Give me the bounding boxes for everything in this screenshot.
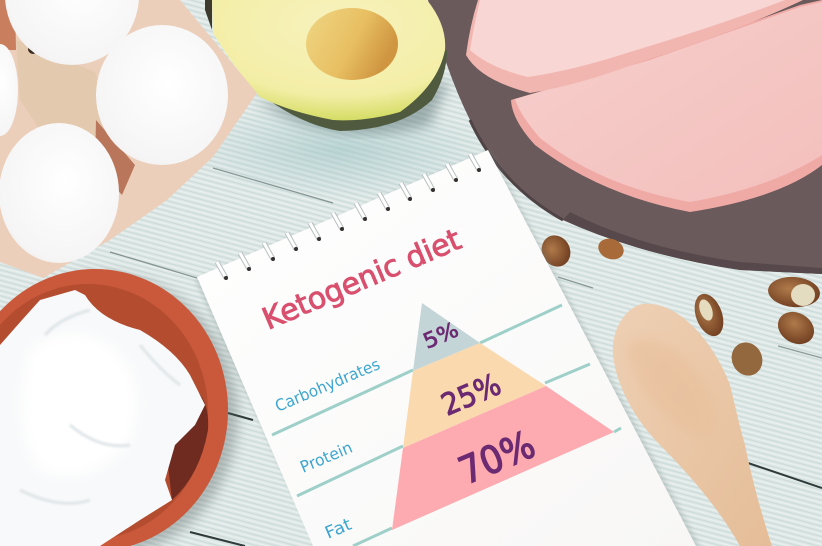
label: Fat: Fat <box>322 515 355 544</box>
raw meat: upper slice <box>466 0 803 93</box>
value: 5%: 5% <box>420 317 462 354</box>
spiral binding <box>217 154 481 280</box>
eggs <box>0 0 228 263</box>
avocado pit <box>306 8 398 80</box>
notepad sheet <box>195 150 700 546</box>
coconut oil <box>0 290 205 546</box>
raw meat: lower slice <box>511 0 822 212</box>
wooden spoon <box>613 304 772 546</box>
tier: fat 70% <box>392 386 614 530</box>
pyramid chart <box>392 303 614 530</box>
slate board <box>428 0 822 274</box>
label: Carbohydrates: Carbohydrates <box>272 354 383 416</box>
almonds <box>537 231 821 381</box>
divider lines <box>272 305 621 546</box>
tier: protein 25% <box>403 343 546 448</box>
title: Ketogenic diet <box>257 222 466 337</box>
label: Protein: Protein <box>297 438 355 477</box>
value: 25%: 25% <box>436 367 506 423</box>
shadow under avocado <box>255 80 450 133</box>
terracotta bowl <box>0 269 238 546</box>
egg carton <box>0 0 257 278</box>
avocado half <box>205 0 447 131</box>
value: 70%: 70% <box>452 422 541 493</box>
tier: carbohydrates 5% <box>413 303 480 371</box>
